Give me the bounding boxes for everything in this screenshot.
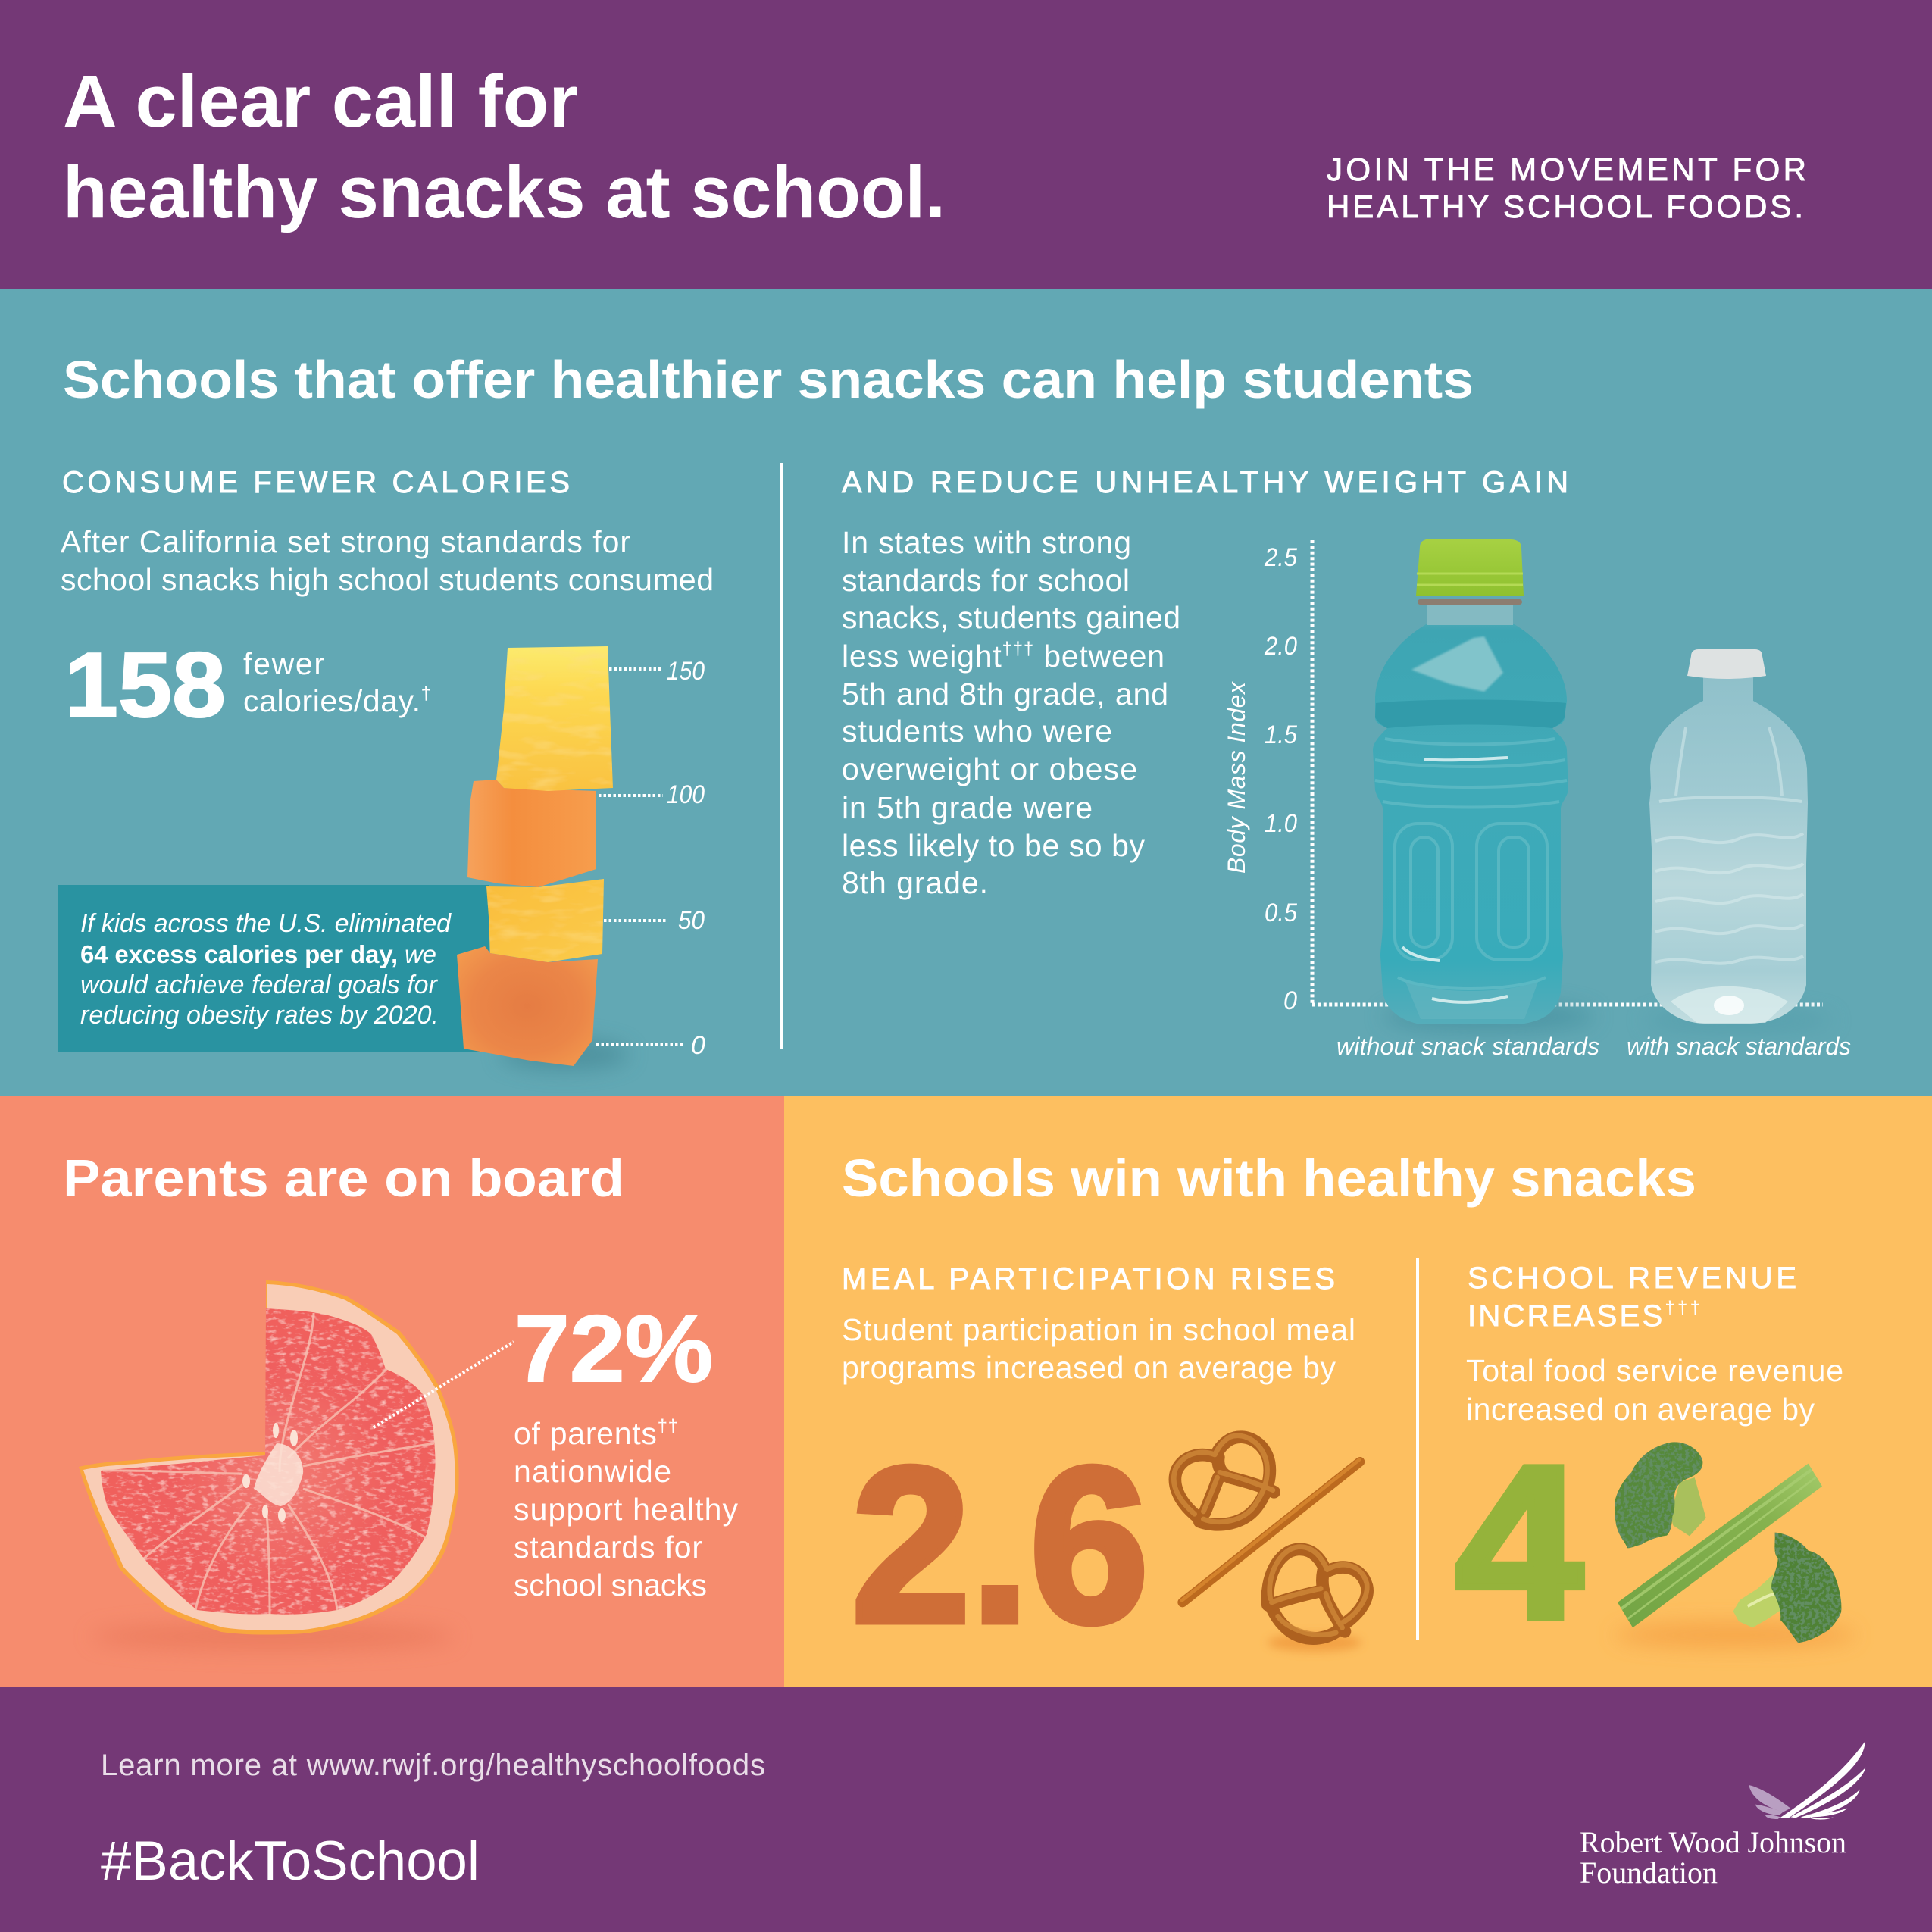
x axis labels: without snack standards — [1336, 1033, 1599, 1060]
y axis labels: 2.5 — [1264, 543, 1297, 572]
icon: broccoli top — [1615, 1442, 1706, 1548]
icon: blue bottle without standards — [1373, 539, 1568, 1024]
text block: parents support: †† — [658, 1416, 678, 1436]
statistic: 2.6% with pretzels: 2.6 — [852, 1421, 1149, 1668]
callout: excess calories: reducing obesity rates by 2020. — [80, 1001, 439, 1030]
icon: grapefruit slice — [79, 1280, 459, 1650]
chart: body mass index bottles — [1223, 539, 1851, 1060]
y axis labels: 1.0 — [1265, 809, 1297, 838]
subheading: reduce weight gain: AND REDUCE UNHEALTHY WEIGHT GAIN — [842, 466, 1568, 499]
text block: states with strong standards: less likely to be so by — [842, 828, 1146, 863]
axis tick: 0: 0 — [691, 1031, 705, 1060]
icon: pretzel top — [1174, 1436, 1274, 1524]
icon: clear bottle with standards — [1649, 649, 1808, 1024]
text block: parents support: standards for — [514, 1530, 702, 1565]
text block: parents support: nationwide — [514, 1454, 671, 1489]
text block: states with strong standards: overweight or obese — [842, 752, 1137, 786]
icon: celery stick — [1618, 1464, 1822, 1627]
logo: robert wood johnson foundation: Foundation — [1580, 1855, 1718, 1890]
text block: food service revenue — [1466, 1353, 1843, 1427]
heading: Schools win with healthy snacks — [842, 1149, 1696, 1208]
text block: parents support: of parents — [514, 1416, 657, 1451]
subheading: consume fewer calories: CONSUME FEWER CALORIES — [62, 466, 570, 499]
title: healthy snacks at school. — [63, 151, 946, 233]
ring — [1418, 599, 1522, 605]
text block: student participation: Student participation in school meal — [842, 1312, 1355, 1347]
subheading: meal participation: MEAL PARTICIPATION RISES — [842, 1262, 1335, 1296]
title: A clear call for — [63, 60, 578, 142]
panel: parents are on board — [0, 1096, 784, 1687]
callout: excess calories: If kids across the U.S. eliminated — [80, 909, 452, 938]
axes — [1312, 540, 1823, 1005]
x axis labels — [1336, 1033, 1851, 1060]
text block: states with strong standards: snacks, students gained — [842, 600, 1180, 635]
text block: food service revenue: increased on average by — [1466, 1392, 1815, 1427]
statistic: 158 fewer calories per day — [64, 633, 431, 736]
text block: student participation — [842, 1312, 1355, 1385]
grapefruit core — [242, 1423, 303, 1522]
call to action: HEALTHY SCHOOL FOODS. — [1327, 189, 1803, 224]
y axis labels — [1264, 543, 1297, 1015]
subheading: school revenue: INCREASES — [1468, 1299, 1662, 1333]
y axis labels: 0.5 — [1265, 899, 1297, 927]
pointer line — [374, 1342, 514, 1427]
icon: pretzel stick — [1182, 1460, 1360, 1602]
text block: states with strong standards: 5th and 8th grade, and — [842, 677, 1168, 711]
text block: student participation: programs increased on average by — [842, 1350, 1336, 1385]
pretzels and stick — [1174, 1436, 1368, 1639]
text block: parents support — [514, 1416, 738, 1602]
text block: states with strong standards: students who were — [842, 714, 1112, 749]
text block: states with strong standards: In states with strong — [842, 525, 1131, 560]
statistic: 4% with broccoli and celery — [1455, 1421, 1856, 1665]
x axis labels: with snack standards — [1627, 1033, 1851, 1060]
panel: schools that offer healthier snacks — [0, 289, 1932, 1096]
logo: robert wood johnson foundation — [1580, 1741, 1866, 1890]
fruit cube: melon — [467, 780, 596, 887]
statistic: 158 fewer calories per day: † — [421, 683, 431, 704]
text block: states with strong standards: between — [1034, 639, 1165, 674]
logo: robert wood johnson foundation: Robert Wood Johnson — [1580, 1825, 1846, 1859]
text block: food service revenue: Total food service revenue — [1466, 1353, 1843, 1388]
y axis title: Body Mass Index — [1223, 681, 1250, 874]
icon: wing — [1749, 1741, 1866, 1820]
pretzel shadow — [1268, 1633, 1361, 1652]
fruit cube: pineapple top — [496, 646, 613, 791]
subheading: school revenue: SCHOOL REVENUE — [1468, 1261, 1796, 1295]
callout: excess calories — [58, 885, 489, 1052]
call to action — [1327, 152, 1806, 224]
text block: parents support: support healthy — [514, 1492, 738, 1527]
statistic: 158 fewer calories per day: 158 — [64, 633, 226, 736]
text block: states with strong standards: 8th grade. — [842, 865, 988, 900]
panel: schools win with healthy snacks — [784, 1096, 1932, 1687]
axis tick: 100: 100 — [667, 780, 705, 809]
panel: header — [0, 0, 1932, 289]
text block: states with strong standards — [842, 525, 1180, 900]
axis tick: 50: 50 — [678, 906, 705, 935]
statistic: 2.6% with pretzels — [852, 1421, 1368, 1668]
fruit cube: melon bottom — [457, 946, 598, 1066]
subheading: school revenue — [1468, 1261, 1796, 1333]
axis tick: 50 — [604, 906, 705, 935]
statistic: 4% with broccoli and celery: 4 — [1455, 1421, 1584, 1665]
callout: excess calories: 64 excess calories per day, we — [80, 940, 436, 968]
statistic: 158 fewer calories per day: fewer — [243, 646, 324, 681]
cap — [1687, 649, 1766, 679]
cap — [1416, 539, 1524, 596]
bottle shadows — [1383, 1002, 1834, 1032]
callout: excess calories: would achieve federal goals for — [80, 971, 439, 999]
fruit cube: pineapple — [486, 879, 604, 962]
vegetable shadow — [1614, 1623, 1856, 1647]
panel: footer — [0, 1687, 1932, 1932]
statistic: 158 fewer calories per day: calories/day. — [243, 683, 420, 718]
y axis labels: 2.0 — [1264, 632, 1297, 661]
icon: pretzel bottom — [1268, 1547, 1368, 1639]
statistic: 72%: 72% — [514, 1296, 713, 1402]
text block: states with strong standards: in 5th grade were — [842, 790, 1093, 825]
heading: Schools that offer healthier snacks can help students — [63, 350, 1474, 409]
text block: parents support: school snacks — [514, 1568, 707, 1602]
text block: california standards: school snacks high school students consumed — [61, 562, 714, 597]
hashtag: #BackToSchool — [101, 1830, 480, 1892]
call to action: JOIN THE MOVEMENT FOR — [1327, 152, 1806, 187]
y axis labels: 1.5 — [1265, 721, 1297, 749]
text block: states with strong standards: ††† — [1002, 639, 1033, 659]
icon: broccoli bottom — [1733, 1533, 1841, 1643]
axis tick: 150 — [609, 657, 705, 686]
text block: states with strong standards: less weight — [842, 639, 1002, 674]
text block: states with strong standards: standards for school — [842, 563, 1130, 598]
text block: california standards — [61, 524, 714, 597]
link text: Learn more at www.rwjf.org/healthyschoolfoods — [101, 1749, 765, 1782]
chart: stacked fruit calories — [58, 646, 705, 1070]
text block: california standards: After California set strong standards for — [61, 524, 630, 559]
fruit shadow — [500, 1039, 629, 1070]
y axis labels: 0 — [1283, 986, 1297, 1015]
title — [63, 60, 946, 233]
axis tick: 150: 150 — [667, 657, 705, 686]
subheading: school revenue: ††† — [1665, 1298, 1700, 1318]
heading: Parents are on board — [63, 1149, 624, 1208]
